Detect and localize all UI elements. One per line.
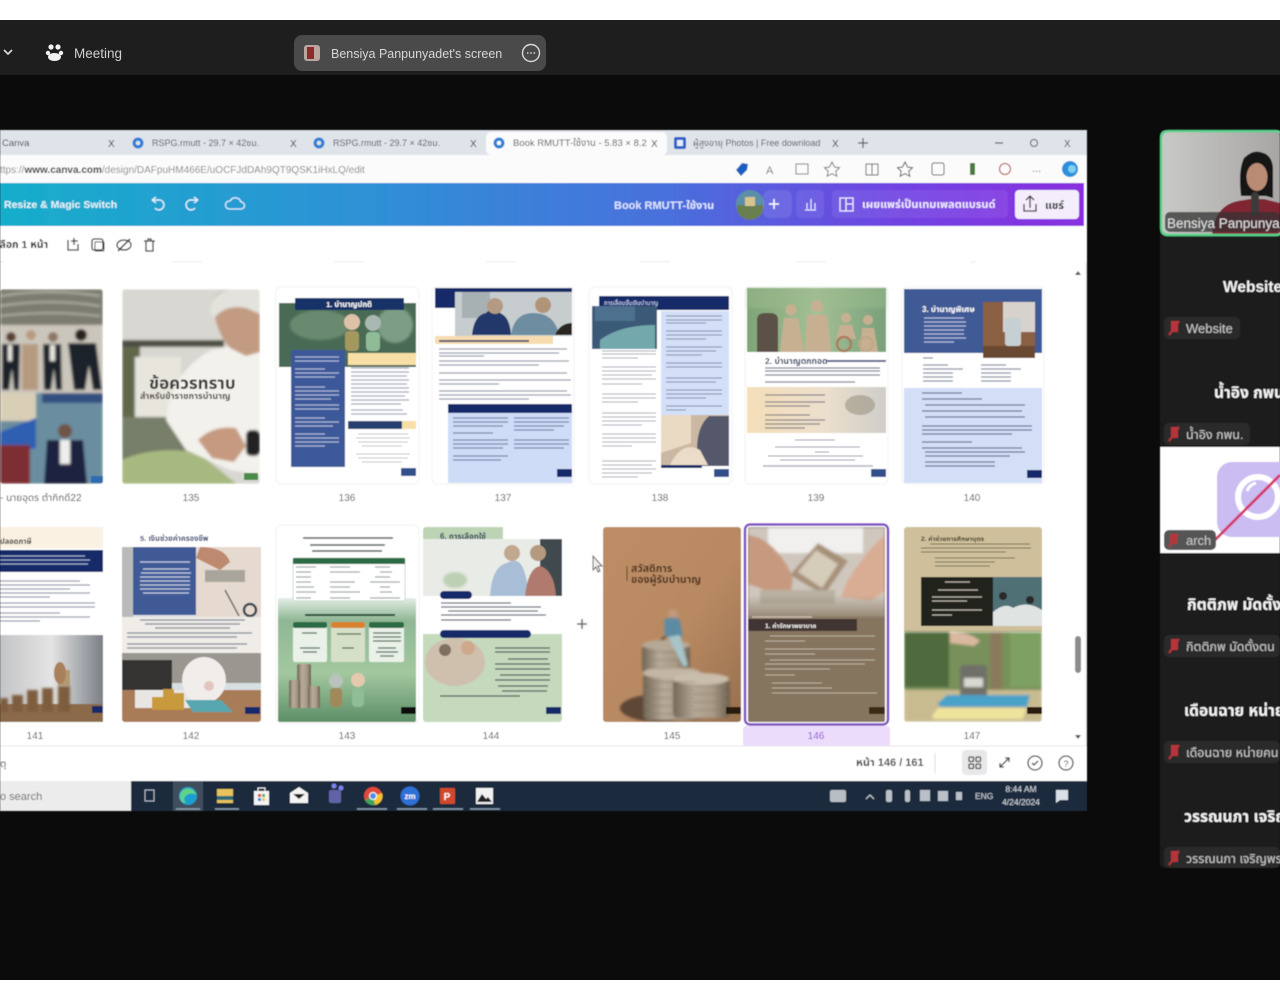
screen share pill — [294, 35, 546, 71]
cover title: สำหรับข้าราชการบำนาญ — [140, 391, 230, 401]
browser tab strip — [0, 130, 1087, 155]
participant tile: Nam-ing: น้ำอิง กพน. — [1186, 426, 1243, 442]
row two page numbers: 142 — [183, 731, 200, 742]
thumbnail page 143 — [276, 525, 419, 723]
row two page numbers: 145 — [664, 731, 681, 742]
canva purple header: เผยแพร่เป็นเทมเพลตแบรนด์ — [862, 198, 996, 211]
row one page numbers: 137 — [495, 493, 512, 504]
browser tab strip: RSPG.rmutt - 29.7 × 42ซม. — [152, 138, 259, 148]
participant tile: arch: arch — [1186, 533, 1211, 548]
thumbnail page 142 — [122, 527, 261, 722]
row one page numbers: - นายอุดร ตำกิกดี22 — [0, 492, 82, 504]
canva purple header — [0, 183, 1084, 226]
browser tab strip: Canva — [2, 138, 30, 149]
icon: zoom: zm — [404, 792, 416, 801]
participant tile: speaker Bensiya — [1160, 130, 1280, 236]
thumbnail page 139: 2. บำนาญตกทอด — [765, 356, 827, 366]
cover title — [631, 563, 701, 586]
browser address bar: ... — [1032, 163, 1041, 175]
canva footer bar — [0, 746, 1087, 781]
thumbnail page 147: 2. ค่าช่วยการศึกษาบุตร — [921, 535, 985, 544]
row two page numbers — [27, 731, 981, 742]
cover title — [140, 374, 236, 401]
thumbnail page 138: การเลื่อนขั้นเงินบำนาญ — [604, 298, 658, 307]
canva purple header: Resize & Magic Switch — [4, 199, 117, 211]
browser tab strip: RSPG.rmutt - 29.7 × 42ซม. — [333, 138, 440, 148]
page number 136 label: 136 — [339, 493, 356, 504]
participant tile: Kittiphop: กิตติภพ มัดตั้งตน — [1186, 639, 1275, 654]
browser address bar — [0, 155, 1087, 183]
participant tile: arch — [1160, 447, 1280, 553]
coin stacks and figure — [620, 609, 730, 722]
row one page numbers: 138 — [652, 493, 669, 504]
thumbnail page 146 selected — [743, 524, 890, 747]
thumbnail page 136: 1. บำนาญปกติ — [326, 300, 372, 309]
mouse cursor — [593, 556, 602, 572]
browser address bar: ttps://www.canva.com/design/DAFpuHM466E/uOCFJdDAh9QT9QSK1iHxLQ/edit — [0, 165, 365, 176]
browser tab strip: ผู้สูงอายุ Photos | Free download — [693, 138, 820, 149]
icon: chrome — [364, 787, 383, 805]
row one page numbers: 135 — [183, 493, 200, 504]
add page plus icon — [577, 619, 587, 629]
participant gallery panel — [1160, 130, 1280, 868]
thumbnail page 138 — [589, 287, 732, 484]
thumbnail page 141: ปลอดภาษี — [0, 537, 32, 546]
thumbnail page 140: 3. บำนาญพิเศษ — [922, 305, 975, 314]
share button — [1015, 190, 1079, 219]
icon: powerpoint — [440, 788, 455, 804]
browser tab strip: Book RMUTT-ใช้งาน - 5.83 × 8.2 — [513, 138, 647, 149]
windows taskbar — [0, 781, 1087, 811]
row two page numbers: 147 — [964, 731, 981, 742]
cover title: ข้อควรทราบ — [149, 374, 236, 393]
thumbnail page 137 — [432, 287, 574, 484]
thumbnail page 142: 5. เงินช่วยค่าครองชีพ — [140, 534, 209, 543]
thumbnail page 144: 6. การเลือกใช้ — [440, 531, 486, 541]
row two page numbers: 141 — [27, 731, 44, 742]
participant tile: Wannapa: วรรณนภา เจริญพร — [1186, 852, 1280, 866]
browser tab strip: X — [832, 139, 839, 150]
share button: แชร์ — [1045, 200, 1064, 212]
icon: meeting paw — [46, 44, 63, 61]
icon: teams — [329, 784, 344, 803]
cover title: สวัสดิการ — [631, 563, 673, 575]
browser tab strip: X — [651, 139, 658, 150]
row one page numbers: 139 — [808, 493, 825, 504]
system tray: ENG — [975, 791, 993, 801]
participant tile: Duenchai — [1164, 702, 1280, 763]
browser tab strip: X — [1064, 139, 1071, 150]
thumbnail page 136 — [276, 287, 419, 484]
browser tab strip: X — [470, 139, 477, 150]
meeting label: Meeting — [74, 46, 122, 61]
canva purple header: Book RMUTT-ใช้งาน — [614, 199, 714, 212]
system tray: 4/24/2024 — [1002, 797, 1040, 807]
system tray: 8:44 AM — [1005, 784, 1037, 794]
browser tab strip: X — [290, 139, 297, 150]
icon: photos — [476, 788, 493, 804]
icon: edge — [179, 787, 197, 805]
system tray — [830, 784, 1068, 807]
participant tile: Website — [1164, 279, 1280, 339]
icon: zoom — [400, 786, 420, 806]
thumbnail page 141 — [0, 525, 105, 723]
row two page numbers: 143 — [339, 731, 356, 742]
canva footer bar: ตุ — [0, 759, 6, 770]
shared screen: browser window — [0, 130, 1087, 811]
participant tile: Website: Website — [1186, 321, 1233, 336]
thumbnail page 145 — [603, 527, 741, 722]
thumbnail page 144 — [423, 527, 562, 722]
participant tile: Duenchai: เดือนฉาย หน่ายคน — [1186, 746, 1278, 760]
canva footer bar: หน้า 146 / 161 — [856, 756, 924, 769]
cover title: ของผู้รับบำนาญ — [631, 573, 701, 586]
icon: muted microphone — [1169, 321, 1179, 335]
browser address bar: A — [766, 165, 774, 177]
thumbnail grid canvas — [0, 262, 1087, 747]
participant tile: Wannapa — [1164, 809, 1280, 868]
icon: muted microphone — [1169, 639, 1179, 653]
participant tile: Nam-ing — [1164, 381, 1280, 445]
page actions toolbar — [0, 226, 1087, 262]
row one page numbers — [0, 492, 981, 504]
row two page numbers: 144 — [483, 731, 500, 742]
windows taskbar: o search — [0, 791, 42, 803]
icon: muted microphone — [1169, 534, 1178, 547]
thumbnail page 139 — [745, 287, 888, 484]
selected page number: 146 — [808, 731, 825, 742]
thumbnail page 135 — [122, 289, 260, 484]
zoom top bar — [0, 20, 1280, 75]
participant tile: Kittiphop — [1164, 594, 1280, 657]
icon: muted microphone — [1169, 745, 1179, 759]
icon: muted microphone — [1169, 427, 1179, 441]
canva footer bar: ? — [1063, 759, 1069, 769]
thumbnail page 147 — [904, 527, 1042, 722]
thumbnail page 146 selected: 1. ค่ารักษาพยาบาล — [765, 622, 816, 630]
icon: store — [254, 788, 269, 805]
thumbnail page 134: group photo — [0, 289, 103, 484]
scrollbar — [1075, 271, 1081, 739]
icon: files — [217, 789, 233, 803]
screen share pill: Bensiya Panpunyadet's screen — [331, 47, 502, 61]
row one page numbers: 140 — [964, 493, 981, 504]
thumbnail page 140 — [902, 287, 1044, 484]
icon: powerpoint: P — [444, 792, 451, 803]
browser tab strip: X — [108, 139, 115, 150]
icon: muted microphone — [1169, 851, 1179, 865]
icon: mail — [290, 787, 308, 803]
